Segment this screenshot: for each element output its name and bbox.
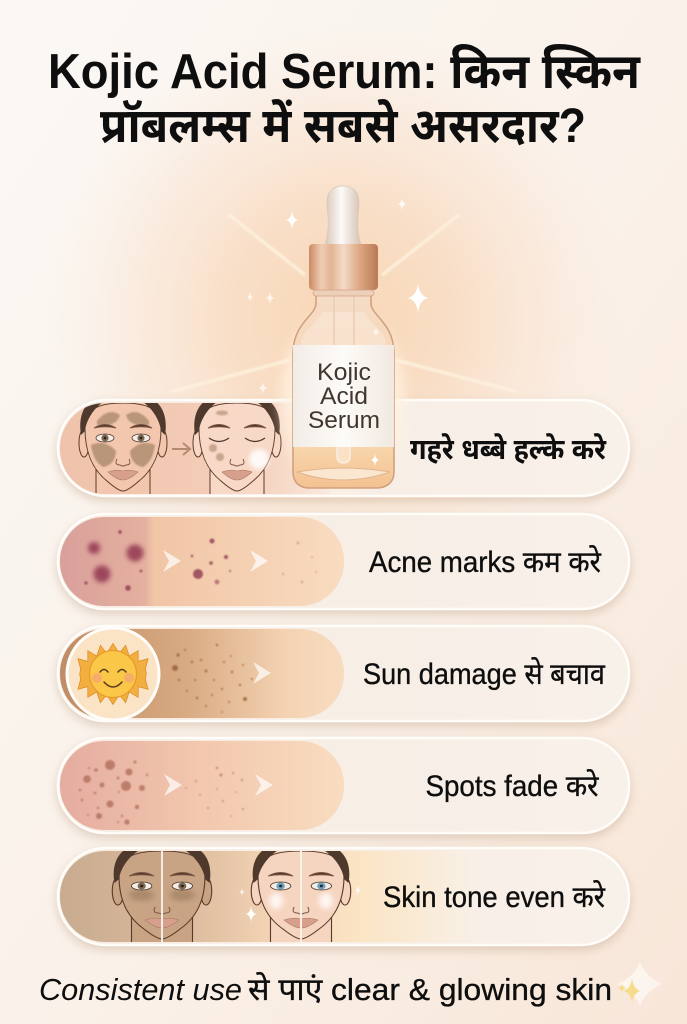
arrow	[172, 443, 190, 455]
label: acne marks: Acne marks कम करे	[369, 544, 602, 579]
panel: dark spots	[58, 397, 629, 501]
footer tagline	[39, 972, 612, 1007]
label: sun damage: Sun damage से बचाव	[363, 656, 606, 691]
title: Kojic Acid Serum: किन स्किन	[48, 43, 641, 99]
panel: acne marks	[58, 514, 629, 609]
panel: sun damage	[58, 626, 629, 721]
icon: face with dark patches	[78, 403, 282, 494]
bottle label	[293, 345, 394, 447]
icon: sparkles	[618, 962, 662, 1006]
bottle label text: Serum	[308, 407, 380, 434]
sun spots texture	[172, 644, 253, 713]
label: spots fade: Spots fade करे	[426, 768, 599, 803]
bottle label text: Kojic	[317, 359, 371, 386]
serum bottle	[281, 186, 405, 492]
icon: before and after faces	[112, 851, 361, 942]
arrow	[253, 662, 271, 684]
spots fading	[79, 760, 273, 825]
panel: even skin tone	[58, 845, 629, 949]
footer tagline: Consistent use	[39, 972, 242, 1007]
acne marks fading	[84, 530, 317, 591]
dropper collar	[309, 244, 378, 290]
dropper bulb	[325, 186, 361, 245]
icon: smiling sun	[67, 628, 159, 720]
background glow and light rays	[48, 25, 638, 615]
label: even skin tone: Skin tone even करे	[383, 879, 606, 914]
footer tagline: से पाएं clear & glowing skin	[248, 972, 612, 1007]
bottle label text: Acid	[320, 383, 368, 410]
title	[48, 43, 641, 153]
title: प्रॉबलम्स में सबसे असरदार?	[100, 98, 586, 153]
bottle glass	[293, 294, 394, 488]
panel: spots fade	[58, 738, 629, 833]
label: lighten dark spots: गहरे धब्बे हल्के करे	[410, 432, 607, 466]
bottle label text	[308, 359, 380, 434]
